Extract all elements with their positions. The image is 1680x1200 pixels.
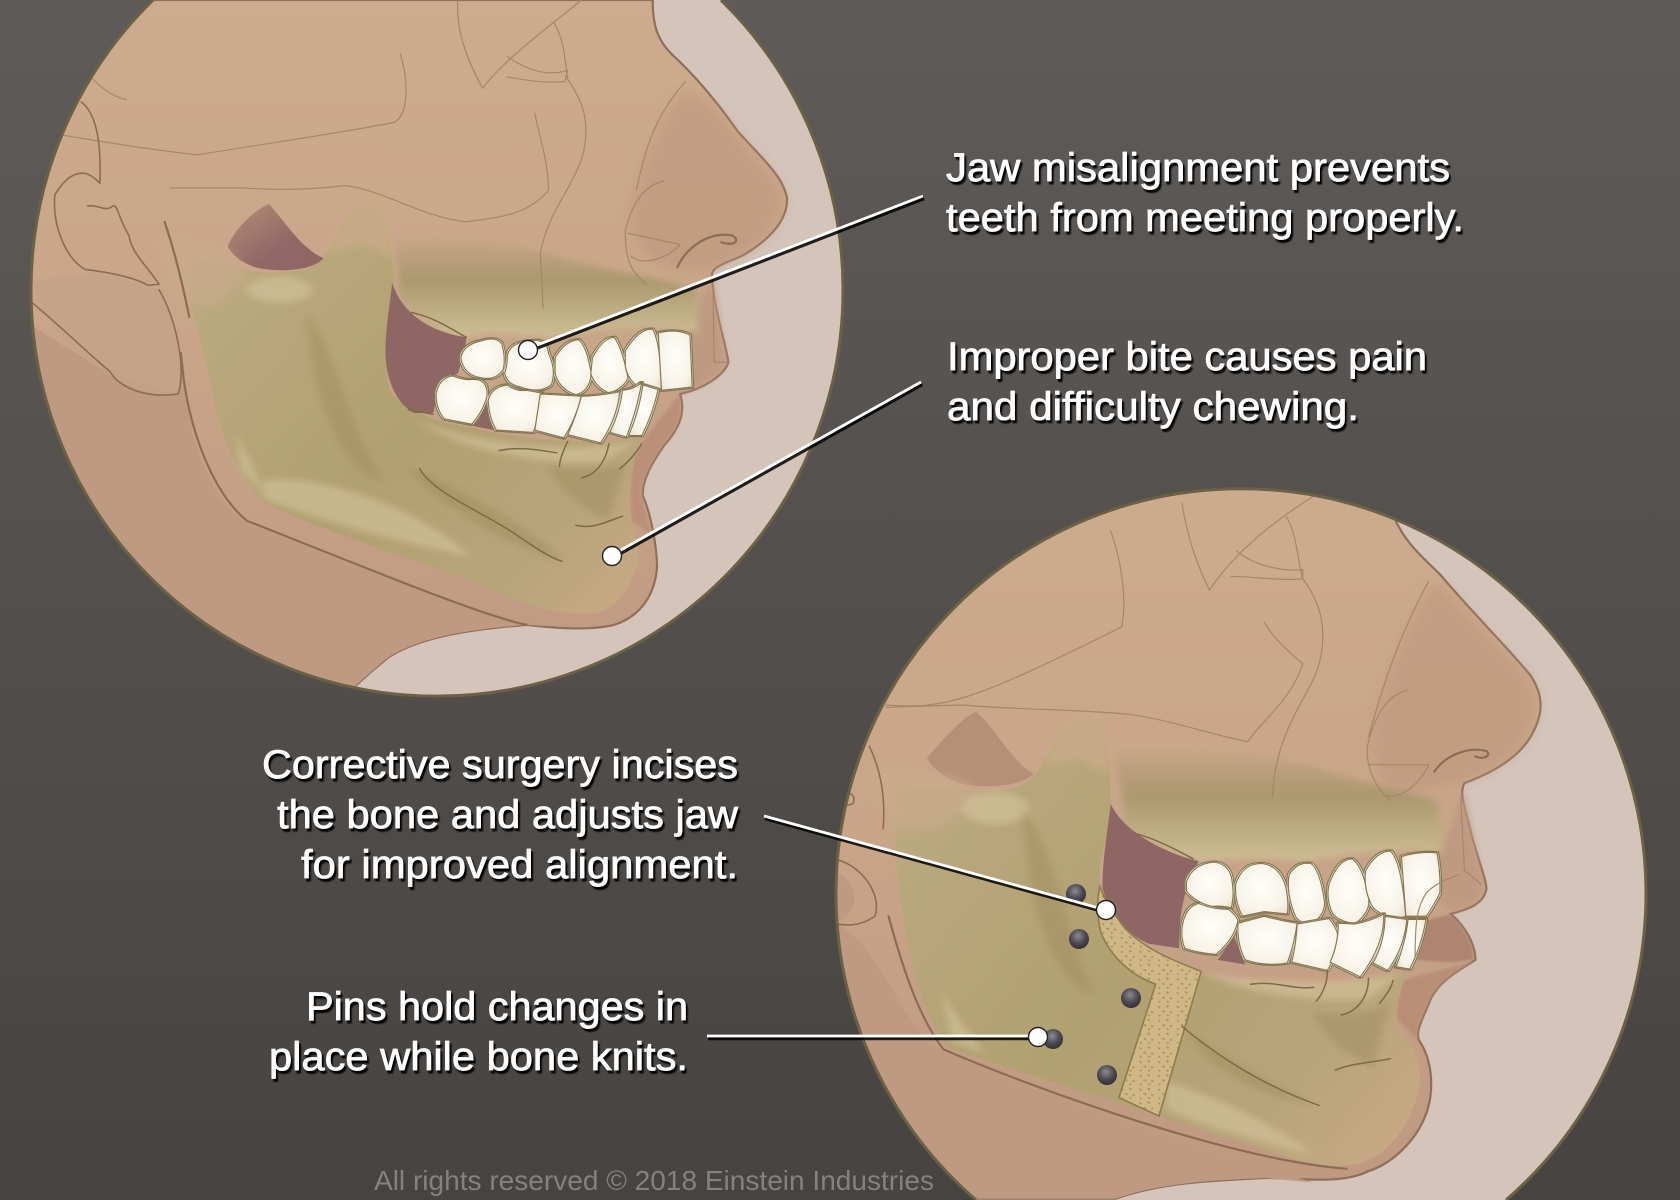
maxilla xyxy=(396,247,700,338)
maxilla xyxy=(1118,759,1444,862)
skull contour lines xyxy=(886,496,1488,958)
graft inner margin xyxy=(1182,1026,1319,1105)
callout: corrective surgery: for improved alignment. xyxy=(301,843,738,887)
leader line: pins xyxy=(707,1028,1048,1046)
ramus fade xyxy=(892,775,972,826)
callout: improper bite: Improper bite causes pain xyxy=(947,335,1427,379)
mandible highlights xyxy=(941,792,1401,1155)
callout: pins: place while bone knits. xyxy=(269,1035,688,1079)
jaw cavity xyxy=(385,283,466,413)
callout: jaw misalignment: teeth from meeting properly. xyxy=(946,196,1464,240)
callout: pins: Pins hold changes in xyxy=(306,985,688,1029)
ear contour lines xyxy=(33,102,181,395)
nose shading xyxy=(631,93,782,272)
condyle fade xyxy=(333,204,391,255)
jaw cavity xyxy=(1102,804,1198,948)
leader line: corrective surgery xyxy=(764,816,1116,920)
upper throat cavity xyxy=(228,204,324,270)
lip shading xyxy=(679,281,728,394)
ear contour lines xyxy=(831,746,884,925)
callout: corrective surgery: Corrective surgery incises xyxy=(262,743,738,787)
bone graft xyxy=(1098,886,1201,1116)
jaw bone detail lines xyxy=(420,441,642,561)
ear xyxy=(33,272,181,395)
lower lip and chin shading xyxy=(631,395,681,534)
gap between lower teeth xyxy=(1218,937,1245,964)
nose shading xyxy=(1371,583,1535,793)
pins xyxy=(1043,884,1141,1085)
jaw and neck outline xyxy=(165,222,527,625)
ramus fade xyxy=(186,251,240,300)
callout: jaw misalignment: Jaw misalignment prevents xyxy=(946,146,1450,190)
copyright: All rights reserved © 2018 Einstein Industries xyxy=(374,1165,934,1196)
lower teeth xyxy=(436,376,658,443)
upper teeth xyxy=(461,329,692,395)
neck and cheek shading xyxy=(34,327,564,686)
leader line: improper bite xyxy=(602,382,922,566)
head silhouette xyxy=(0,0,787,706)
panel: misaligned jaw illustration xyxy=(0,0,843,706)
neck and cheek shading xyxy=(820,866,1314,1199)
lower lip shading xyxy=(1415,915,1474,962)
jaw and neck outline xyxy=(889,916,1347,1169)
upper teeth xyxy=(1186,851,1440,924)
condyle fade xyxy=(1048,716,1108,771)
callout: improper bite: and difficulty chewing. xyxy=(947,385,1359,429)
mandible highlights xyxy=(236,277,636,557)
head silhouette xyxy=(820,480,1541,1199)
lip shading xyxy=(1440,792,1486,914)
callout: corrective surgery xyxy=(262,743,738,887)
callout: pins xyxy=(269,985,688,1079)
throat cavity xyxy=(927,712,1034,786)
gap between lower teeth xyxy=(472,406,494,430)
jaw bone detail lines xyxy=(1251,971,1393,1070)
mandible xyxy=(891,716,1421,1166)
skull contour lines xyxy=(33,0,736,362)
leader line: jaw misalignment xyxy=(518,196,924,360)
lower teeth xyxy=(1182,903,1426,977)
callout: improper bite xyxy=(947,335,1427,429)
mandible shadows xyxy=(307,312,625,561)
callout: corrective surgery: the bone and adjusts jaw xyxy=(277,793,738,837)
cavity ridge xyxy=(1135,834,1193,859)
panel: corrected jaw illustration xyxy=(820,480,1646,1200)
cavity ridge xyxy=(409,312,466,414)
callout: jaw misalignment xyxy=(946,146,1464,240)
mandible xyxy=(186,204,642,614)
chin shading xyxy=(1396,961,1474,1040)
mandible shadows xyxy=(1023,811,1390,1105)
